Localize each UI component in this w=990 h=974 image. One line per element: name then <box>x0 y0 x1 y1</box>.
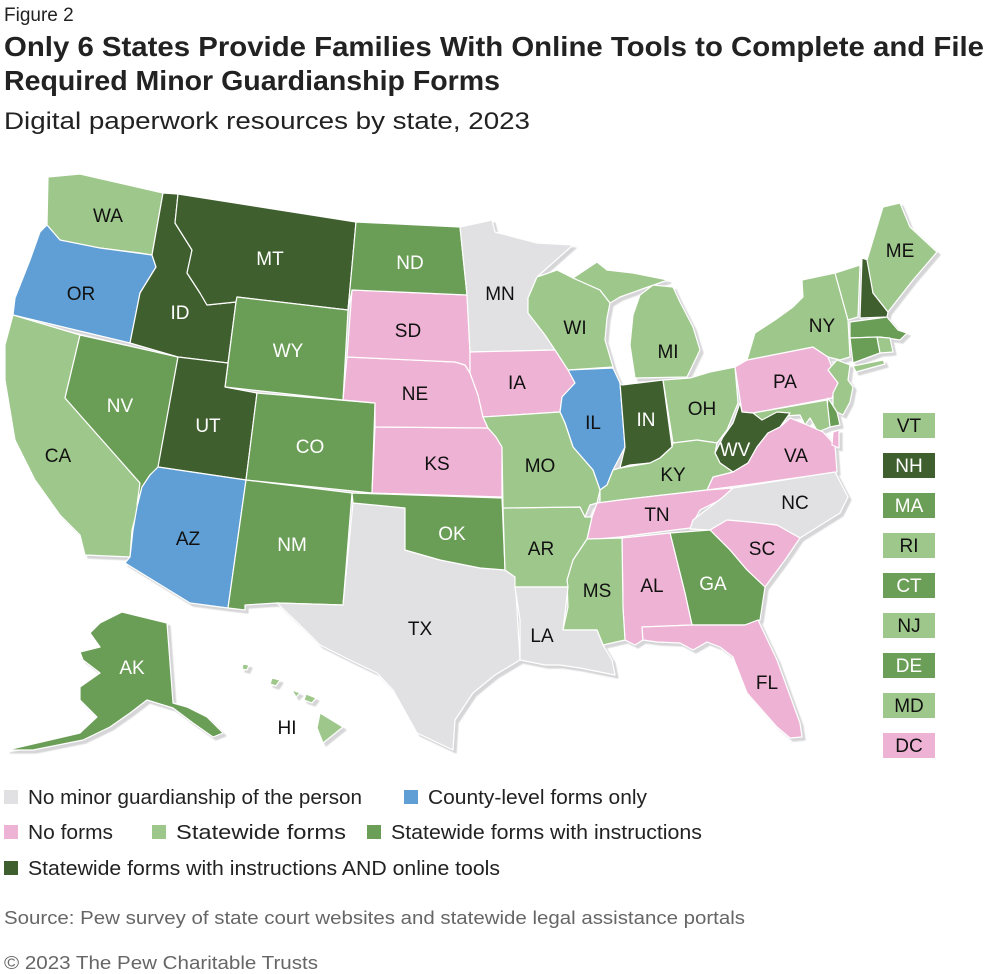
legend: No minor guardianship of the person <box>28 787 362 809</box>
state labels: TN <box>644 505 670 526</box>
state labels: OK <box>438 524 466 545</box>
figure label: Figure 2 <box>4 5 74 26</box>
legend: No forms <box>28 822 113 844</box>
legend: Statewide forms with instructions AND online tools <box>28 858 500 880</box>
state labels: AK <box>119 658 145 679</box>
state labels: IA <box>508 373 526 394</box>
state labels: NC <box>781 493 809 514</box>
state labels: CO <box>296 437 324 458</box>
state labels: AR <box>528 539 554 560</box>
small-state legend boxes: CT <box>896 576 922 597</box>
state labels: IL <box>585 413 601 434</box>
state labels: NE <box>402 384 428 405</box>
small-state legend boxes: NH <box>895 456 923 477</box>
title: Only 6 States Provide Families With Online Tools to Complete and File <box>4 31 984 62</box>
state labels: AL <box>640 576 664 597</box>
state labels: ND <box>396 253 424 274</box>
small-state legend boxes: NJ <box>897 616 921 637</box>
state labels: MS <box>583 581 611 602</box>
copyright: © 2023 The Pew Charitable Trusts <box>4 953 318 973</box>
legend: Statewide forms <box>176 822 346 844</box>
state labels <box>45 206 914 739</box>
state labels: VA <box>784 446 808 467</box>
state labels: KS <box>424 454 450 475</box>
state labels: TX <box>408 619 432 640</box>
state labels: MO <box>525 456 555 477</box>
state labels: MT <box>256 249 284 270</box>
state labels: GA <box>699 574 727 595</box>
small-state legend boxes <box>883 413 935 758</box>
state labels: LA <box>530 626 554 647</box>
state labels: AZ <box>176 529 201 550</box>
state labels: FL <box>756 673 778 694</box>
map <box>5 174 937 750</box>
state labels: WY <box>273 341 304 362</box>
small-state legend boxes: RI <box>900 536 918 557</box>
state labels: ME <box>886 241 914 262</box>
state labels: SD <box>395 321 421 342</box>
source: Source: Pew survey of state court websites and statewide legal assistance portals <box>4 908 745 928</box>
state labels: MI <box>657 342 679 363</box>
title: Required Minor Guardianship Forms <box>4 65 500 96</box>
state labels: ID <box>170 303 190 324</box>
state labels: UT <box>195 416 221 437</box>
small-state legend boxes: DC <box>895 736 923 757</box>
subtitle: Digital paperwork resources by state, 2023 <box>4 108 530 135</box>
state labels: WI <box>563 318 587 339</box>
state labels: WA <box>93 206 123 227</box>
state labels: NV <box>107 396 134 417</box>
legend: Statewide forms with instructions <box>391 822 702 844</box>
state labels: OH <box>688 399 716 420</box>
title <box>4 31 984 96</box>
state labels: NY <box>809 316 836 337</box>
state labels: PA <box>773 372 797 393</box>
state labels: HI <box>278 718 296 739</box>
state labels: OR <box>67 284 95 305</box>
state labels: WV <box>720 440 751 461</box>
state labels: KY <box>660 465 686 486</box>
state labels: MN <box>485 284 515 305</box>
state labels: IN <box>636 410 656 431</box>
state labels: CA <box>45 446 72 467</box>
state labels: NM <box>277 535 307 556</box>
small-state legend boxes: DE <box>896 656 922 677</box>
legend: County-level forms only <box>428 787 647 809</box>
state labels: SC <box>749 539 775 560</box>
legend <box>4 787 702 880</box>
small-state legend boxes: VT <box>897 416 922 437</box>
small-state legend boxes: MA <box>895 496 924 517</box>
small-state legend boxes: MD <box>894 696 924 717</box>
